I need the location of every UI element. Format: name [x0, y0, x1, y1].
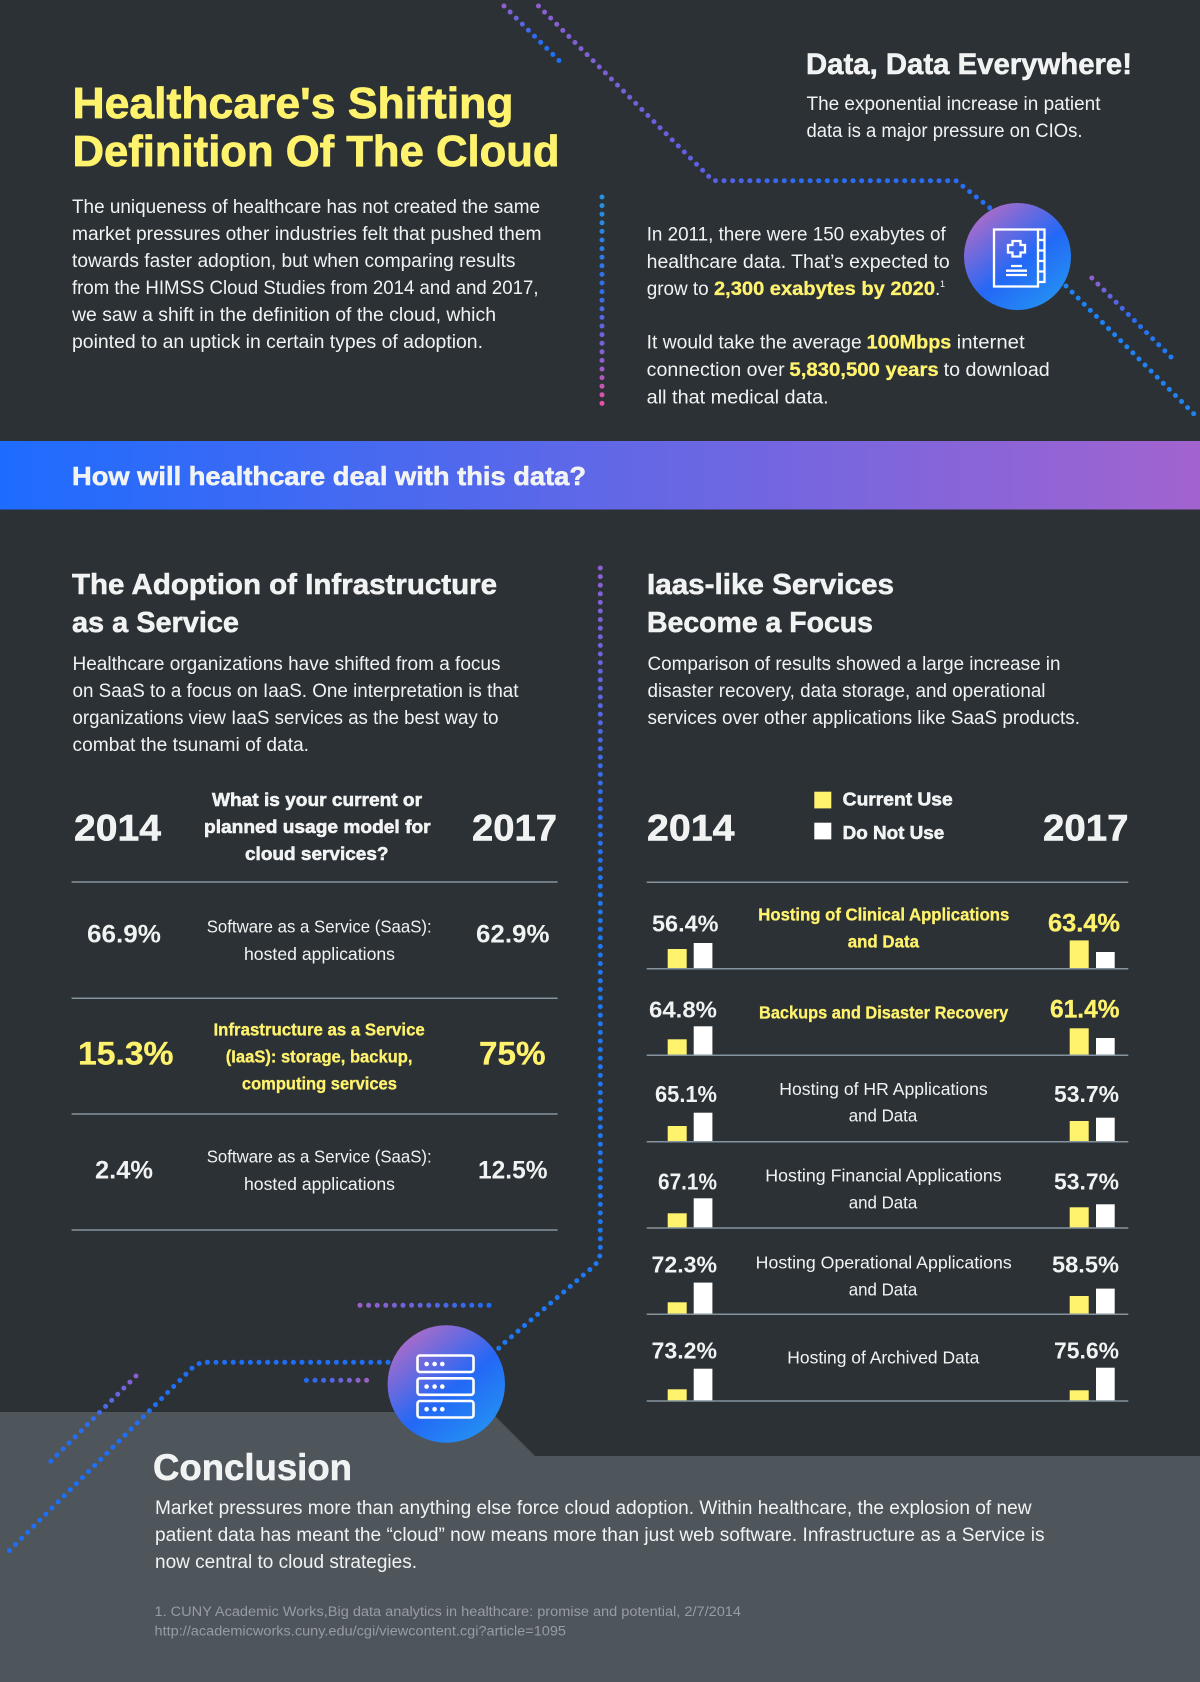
footnote: http://academicworks.cuny.edu/cgi/viewcontent.cgi?article=1095: [154, 1624, 566, 1638]
title: Healthcare's Shifting: [72, 79, 514, 128]
stat text: download time: It would take the average: [647, 333, 862, 354]
row: clinical applications: 56.4%: [652, 910, 718, 936]
description text: [648, 654, 1080, 729]
row: IaaS highlighted: computing services: [242, 1073, 397, 1093]
stat text: download time: internet: [957, 333, 1025, 354]
row: SaaS: 62.9%: [476, 921, 550, 949]
year 2017: 2017: [472, 808, 557, 849]
row: HR applications: 65.1%: [655, 1081, 717, 1107]
icon: server stack: [388, 1325, 505, 1443]
heading: Data, Data Everywhere: Data, Data Everywhere!: [806, 48, 1132, 81]
icon: medical book: [964, 203, 1071, 310]
heading: The Adoption of Infrastructure: [72, 569, 497, 601]
question: What is your current or: [212, 789, 422, 810]
row: archived data: 75.6%: [1054, 1338, 1119, 1364]
dotted line: right short diagonal: [1092, 278, 1174, 360]
row: operational applications: Hosting Operational Applications: [756, 1253, 1012, 1273]
stat text: download time: 100Mbps: [867, 333, 951, 354]
conclusion text: Market pressures more than anything else force cloud adoption. Within healthcare, the explosion of new: [155, 1498, 1032, 1519]
conclusion text: patient data has meant the “cloud” now means more than just web software. Infrastructure as a Service is: [155, 1525, 1044, 1546]
row: HR applications: and Data: [849, 1106, 918, 1126]
stat text: download time: 5,830,500 years: [789, 360, 939, 381]
intro text block: [71, 197, 541, 353]
stat text: exabytes: grow to: [647, 279, 709, 300]
dotted line: top vertical divider: [600, 197, 604, 405]
row: backups and disaster recovery: 61.4%: [1050, 995, 1120, 1023]
legend: Do Not Use: [843, 822, 944, 843]
stat text: exabytes: In 2011, there were 150 exabytes of: [647, 225, 946, 246]
row: backups and disaster recovery: Backups and Disaster Recovery: [759, 1002, 1009, 1022]
dotted line: top connector to book icon: [538, 6, 990, 208]
intro text block: The uniqueness of healthcare has not created the same: [72, 197, 540, 218]
title: [72, 79, 560, 176]
stat text: exabytes: .: [935, 279, 940, 300]
row: archived data: 73.2%: [652, 1338, 717, 1364]
title: Definition Of The Cloud: [72, 127, 560, 176]
legend: [814, 789, 953, 843]
stat text: download time: connection over: [647, 360, 785, 381]
dotted line: connector to server icon: [8, 1362, 388, 1552]
panel: adoption of infrastructure as a service: [72, 569, 558, 1230]
row: financial applications: Hosting Financial Applications: [765, 1166, 1002, 1186]
description text: services over other applications like SaaS products.: [648, 708, 1080, 729]
row: backups and disaster recovery: [647, 995, 1128, 1055]
row: HR applications: Hosting of HR Applications: [779, 1079, 988, 1099]
subheading text: The exponential increase in patient: [806, 94, 1101, 115]
intro text block: we saw a shift in the definition of the cloud, which: [71, 305, 496, 326]
question: planned usage model for: [204, 816, 431, 837]
row: IaaS highlighted: (IaaS): storage, backup,: [226, 1047, 412, 1067]
row: operational applications: [647, 1252, 1128, 1314]
heading: Iaas-like Services: [647, 569, 894, 601]
row: IaaS highlighted: 15.3%: [78, 1036, 174, 1072]
stat text: download time: [647, 333, 1050, 408]
row: SaaS lower: 2.4%: [95, 1156, 153, 1184]
year 2017: 2017: [1043, 808, 1128, 849]
description text: organizations view IaaS services as the best way to: [72, 708, 498, 729]
banner: how will healthcare deal with this data: [0, 441, 1200, 510]
row: financial applications: and Data: [849, 1193, 918, 1213]
row: clinical applications: and Data: [848, 932, 919, 952]
stat text: exabytes: 2,300 exabytes by 2020: [714, 279, 935, 300]
row: financial applications: 67.1%: [658, 1168, 717, 1194]
question: cloud services?: [245, 843, 388, 864]
row: financial applications: [647, 1166, 1128, 1228]
dotted line: lower-left short diagonal: [48, 1376, 136, 1464]
description text: Comparison of results showed a large increase in: [648, 654, 1060, 675]
table: usage model comparison: [72, 789, 558, 1230]
heading: as a Service: [72, 607, 239, 639]
conclusion heading: Conclusion: [153, 1447, 352, 1488]
description text: disaster recovery, data storage, and operational: [648, 681, 1046, 702]
row: archived data: Hosting of Archived Data: [787, 1347, 980, 1367]
row: operational applications: and Data: [849, 1280, 918, 1300]
subheading text: data is a major pressure on CIOs.: [806, 121, 1082, 142]
question: [204, 789, 431, 864]
banner: how will healthcare deal with this data: How will healthcare deal with this data?: [72, 461, 586, 491]
row: clinical applications: Hosting of Clinical Applications: [758, 905, 1010, 925]
row: HR applications: 53.7%: [1054, 1081, 1119, 1107]
stat text: download time: all that medical data.: [647, 387, 829, 408]
year 2014: 2014: [647, 808, 735, 849]
heading: [647, 569, 894, 639]
row: backups and disaster recovery: 64.8%: [649, 996, 717, 1022]
row: clinical applications: [647, 905, 1128, 969]
stat text: download time: to download: [944, 360, 1050, 381]
row: clinical applications: 63.4%: [1048, 909, 1120, 937]
panel: conclusion background: [0, 1412, 1200, 1682]
panel: IaaS-like services: [647, 569, 1128, 1401]
row: IaaS highlighted: [78, 1020, 546, 1093]
stat text: exabytes: 1: [940, 279, 945, 289]
heading: [72, 569, 497, 639]
legend: Current Use: [843, 789, 953, 810]
footnote: 1. CUNY Academic Works,Big data analytics in healthcare: promise and potential, 2/7/2014: [154, 1604, 742, 1619]
intro text block: market pressures other industries felt that pushed them: [72, 224, 542, 245]
row: IaaS highlighted: 75%: [479, 1036, 546, 1072]
row: IaaS highlighted: Infrastructure as a Service: [214, 1020, 425, 1040]
stat text: exabytes: [647, 225, 950, 300]
description text: combat the tsunami of data.: [72, 735, 309, 756]
footnote: [154, 1604, 742, 1638]
conclusion text: [155, 1498, 1044, 1573]
description text: on SaaS to a focus on IaaS. One interpretation is that: [72, 681, 519, 702]
conclusion text: now central to cloud strategies.: [155, 1552, 417, 1573]
chart: services usage comparison: [647, 789, 1128, 1401]
dotted line: short horizontal upper: [360, 1303, 492, 1308]
row: SaaS lower: 12.5%: [478, 1156, 548, 1184]
row: archived data: [647, 1338, 1128, 1401]
year 2014: 2014: [74, 808, 161, 849]
intro text block: pointed to an uptick in certain types of adoption.: [72, 332, 483, 353]
description text: [72, 654, 519, 756]
heading: Become a Focus: [647, 607, 873, 639]
dotted line: right long diagonal: [1066, 286, 1197, 417]
intro text block: from the HIMSS Cloud Studies from 2014 and and 2017,: [72, 278, 538, 299]
row: SaaS lower: Software as a Service (SaaS):: [207, 1147, 432, 1167]
dotted line: short horizontal lower: [306, 1378, 374, 1383]
row: operational applications: 72.3%: [652, 1252, 717, 1278]
row: HR applications: [647, 1079, 1128, 1142]
stat text: exabytes: healthcare data. That’s expected to: [647, 252, 950, 273]
row: financial applications: 53.7%: [1054, 1168, 1119, 1194]
description text: Healthcare organizations have shifted from a focus: [72, 654, 500, 675]
dotted line: top short diagonal: [504, 6, 562, 63]
row: SaaS: Software as a Service (SaaS):: [207, 916, 432, 936]
row: SaaS: [87, 916, 550, 964]
row: SaaS: hosted applications: [244, 944, 395, 964]
row: operational applications: 58.5%: [1052, 1252, 1119, 1278]
row: SaaS: 66.9%: [87, 921, 161, 949]
intro text block: towards faster adoption, but when comparing results: [72, 251, 516, 272]
row: SaaS lower: hosted applications: [244, 1174, 395, 1194]
subheading text: [806, 94, 1101, 142]
row: SaaS lower: [95, 1147, 548, 1194]
dotted line: centre vertical divider: [498, 568, 600, 1349]
